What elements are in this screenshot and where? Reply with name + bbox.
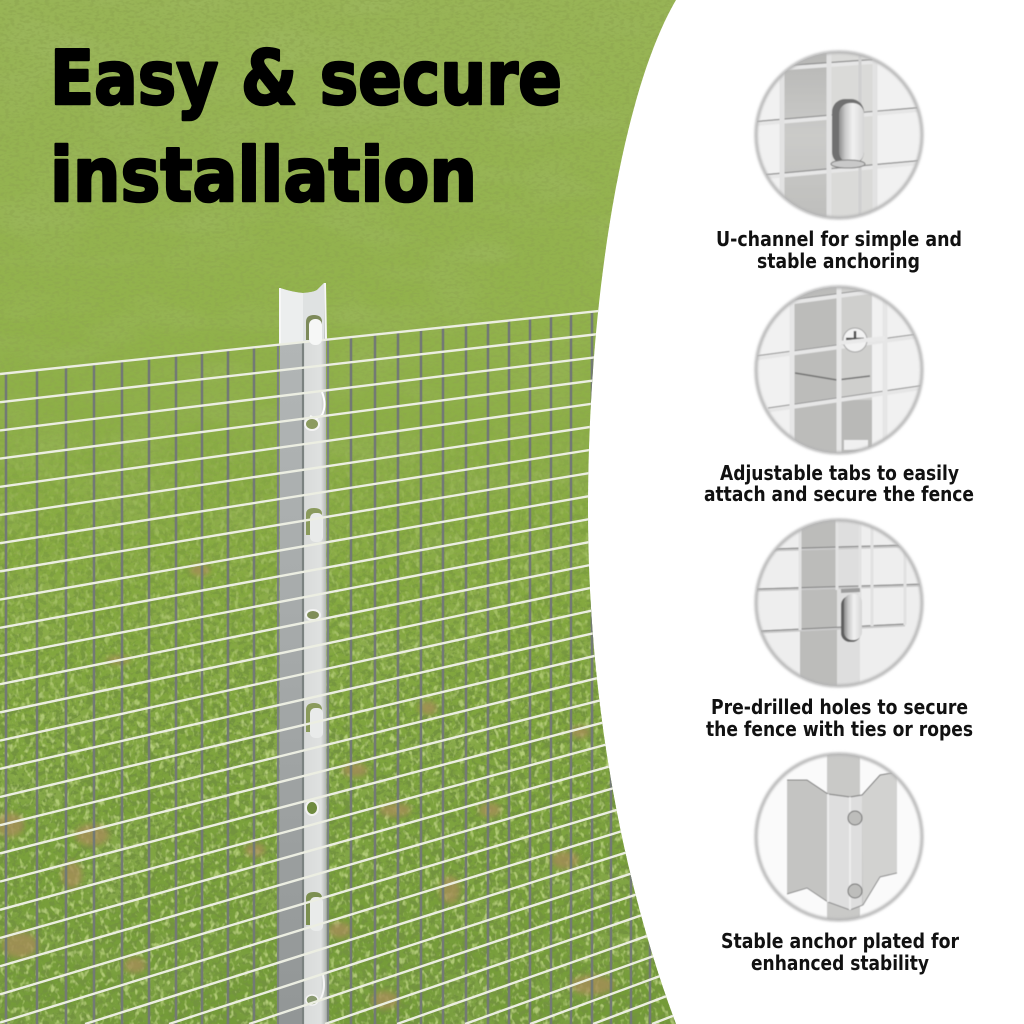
caption: u-channel xyxy=(716,227,962,273)
caption: u-channel: stable anchoring xyxy=(757,249,920,273)
detail photo: adjustable tabs xyxy=(758,287,920,453)
vertical fence wires xyxy=(6,312,650,1024)
caption: anchor plate xyxy=(721,929,959,975)
title: installation xyxy=(50,131,477,219)
post slots, tabs and holes xyxy=(305,315,324,1005)
caption: adjustable tabs: attach and secure the fence xyxy=(704,482,974,506)
caption: adjustable tabs xyxy=(704,461,974,506)
circle rim xyxy=(756,520,922,686)
detail photo: pre-drilled holes xyxy=(757,520,920,686)
caption: anchor plate: Stable anchor plated for xyxy=(721,929,959,953)
circle rim xyxy=(756,52,922,218)
feature 2: adjustable tabs xyxy=(704,280,974,506)
caption: anchor plate: enhanced stability xyxy=(751,951,929,975)
feature 1: u-channel xyxy=(716,45,962,273)
title xyxy=(50,34,562,219)
feature 3: pre-drilled holes xyxy=(706,515,973,741)
top tab over the wire xyxy=(309,319,322,345)
title: Easy & secure xyxy=(50,34,562,122)
circle rim xyxy=(756,754,922,920)
vertical wires crossing the post xyxy=(278,340,328,1024)
circle rim xyxy=(756,287,922,453)
caption: pre-drilled holes xyxy=(706,695,973,741)
caption: adjustable tabs: Adjustable tabs to easily xyxy=(720,461,959,485)
fence post xyxy=(279,283,327,1024)
horizontal fence wires xyxy=(0,300,700,1024)
caption: u-channel: U-channel for simple and xyxy=(716,227,962,251)
feature 4: stable anchor plate xyxy=(721,750,959,975)
caption: pre-drilled holes: Pre-drilled holes to secure xyxy=(711,695,968,719)
grass field with curved edge xyxy=(0,0,700,1024)
detail photo: u-channel xyxy=(757,52,920,218)
detail photo: anchor plate xyxy=(786,754,898,920)
caption: pre-drilled holes: the fence with ties or ropes xyxy=(706,717,973,741)
